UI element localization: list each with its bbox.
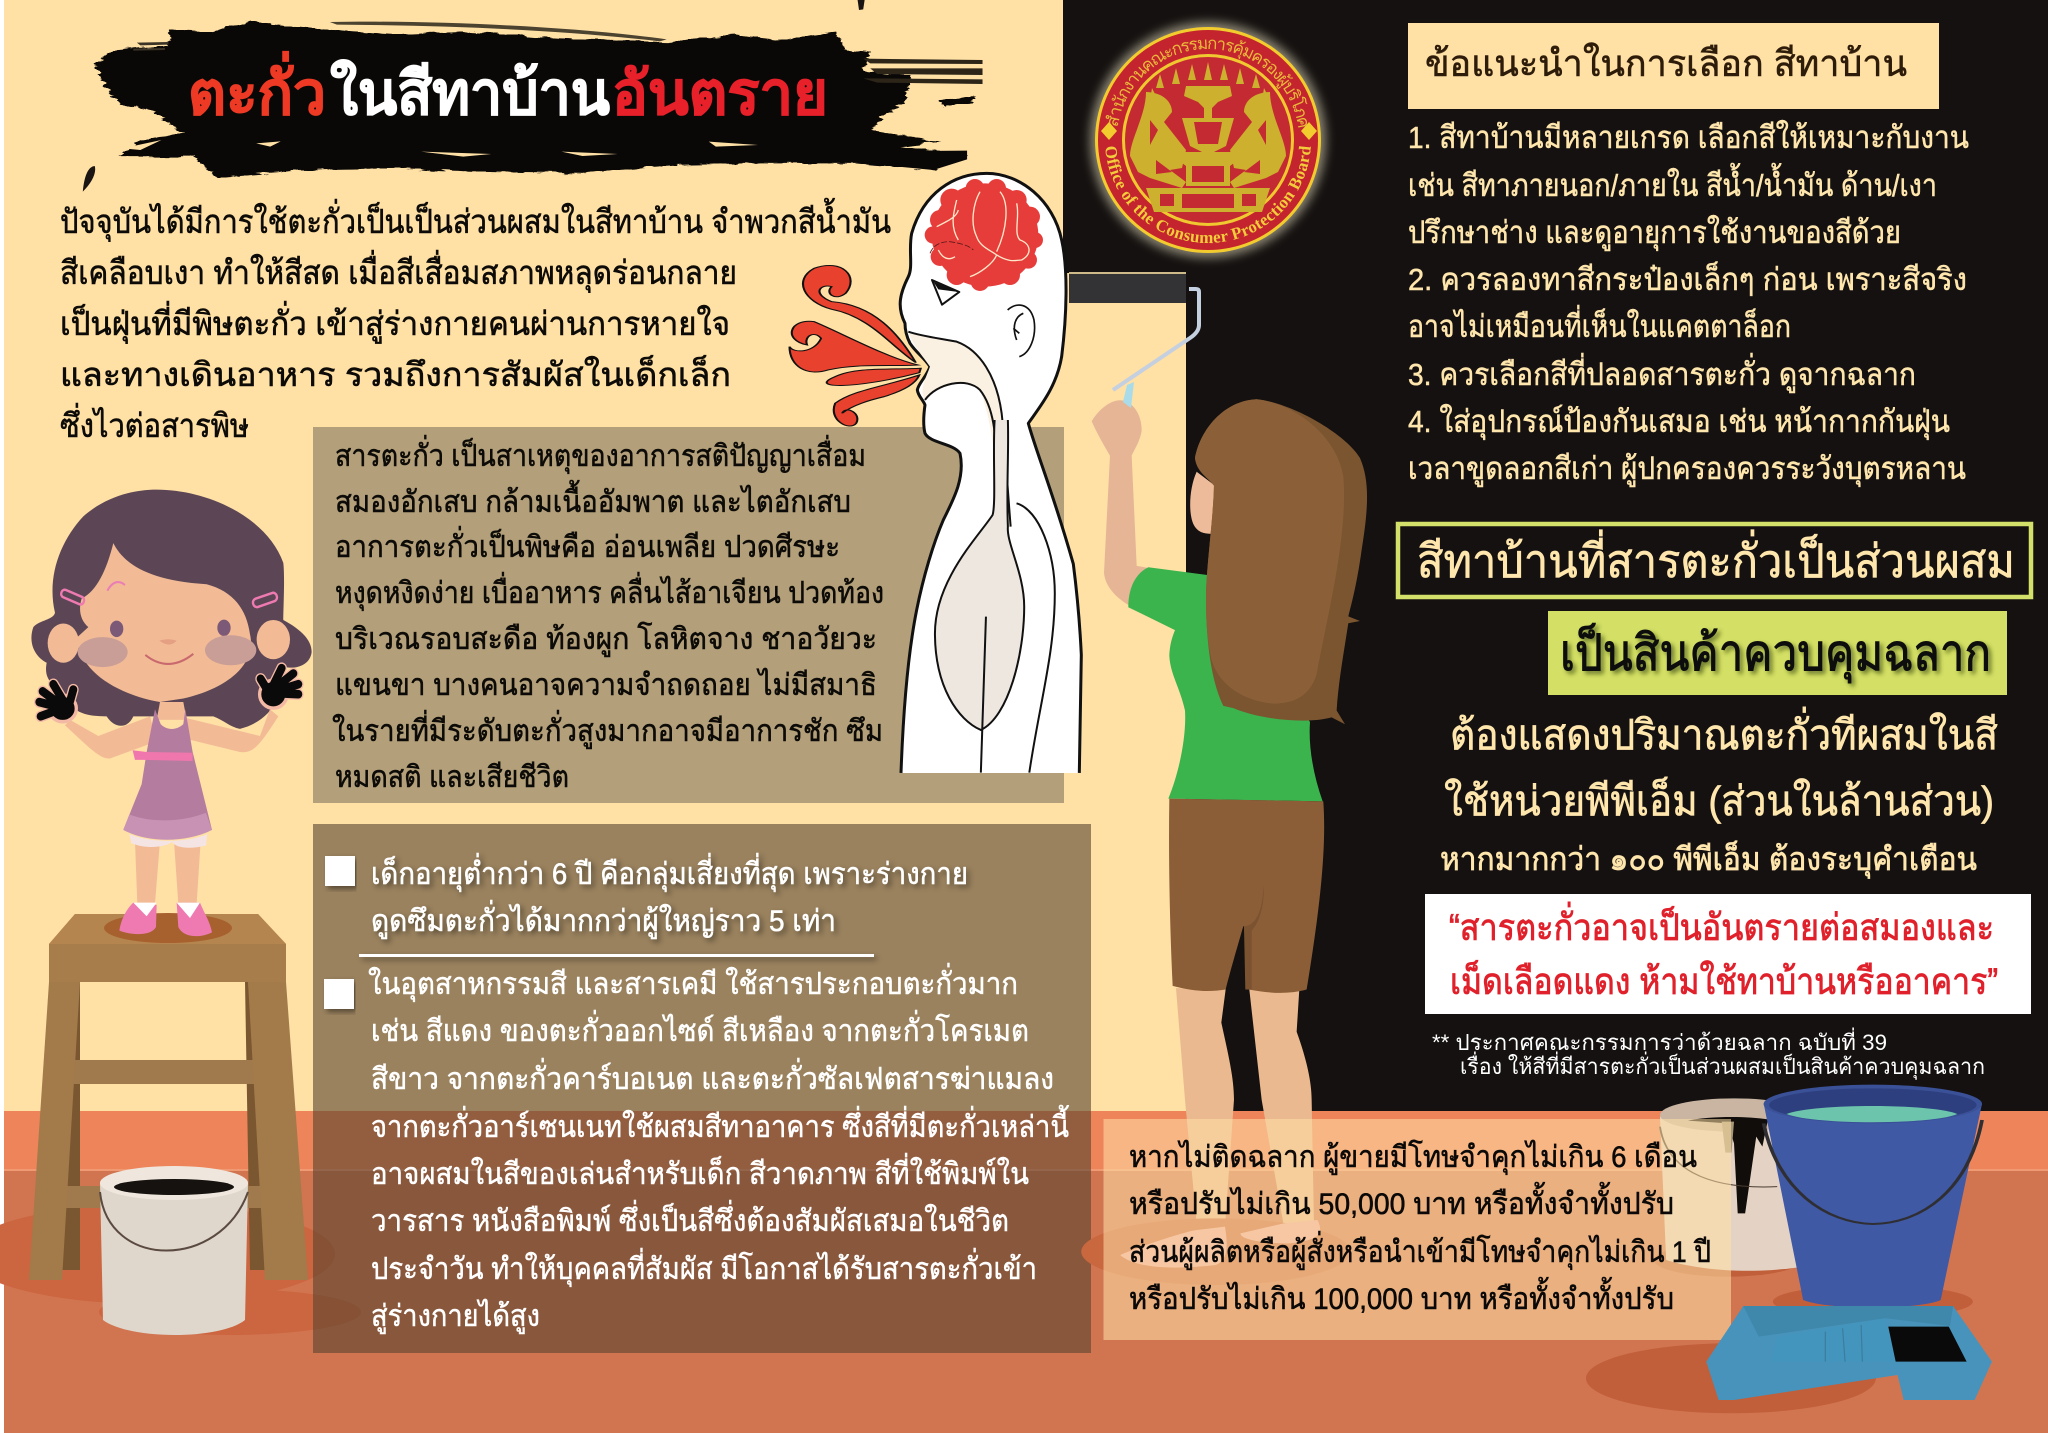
text block: paint selection tips: 1. สีทาบ้านมีหลายเกรด เลือกสีให้เหมาะกับงาน <box>1408 120 1969 155</box>
industry risk text <box>368 963 1069 1334</box>
woman arm <box>1092 400 1150 605</box>
girl left black hand <box>39 684 73 718</box>
text block: labelling requirement: ต้องแสดงปริมาณตะกั่วทีผสมในสี <box>1450 707 1998 758</box>
text block: paint selection tips: 2. ควรลองทาสีกระป๋องเล็กๆ ก่อน เพราะสีจริง <box>1408 261 1967 297</box>
illustration: paint can left <box>100 1166 248 1335</box>
woman shirt <box>1128 567 1323 801</box>
heading: paint selection tips <box>1408 23 1939 109</box>
industry risk text: สีขาว จากตะกั่วคาร์บอเนต และตะกั่วซัลเฟตสารฆ่าแมลง <box>371 1058 1054 1096</box>
airway <box>908 332 1010 527</box>
painted wall strip <box>1063 273 1186 1111</box>
seal: Office of the Consumer Protection Board <box>1083 15 1333 265</box>
floor <box>4 1111 2048 1433</box>
callout: lead paint heading: สีทาบ้านที่สารตะกั่วเป็นส่วนผสม <box>1417 529 2015 587</box>
industry risk text: ในอุตสาหกรรมสี และสารเคมี ใช้สารประกอบตะกั่วมาก <box>368 963 1018 1003</box>
bullet square 2 <box>324 979 354 1009</box>
seal diamonds <box>1101 122 1317 140</box>
text block: labelling requirement: หากมากกว่า ๑๐๐ พีพีเอ็ม ต้องระบุคำเตือน <box>1440 840 1977 879</box>
body silhouette <box>900 173 1081 773</box>
floor shadows left <box>0 1204 361 1335</box>
illustration: floor shadows and woman's feet <box>1081 1218 1973 1413</box>
panel: lead symptoms: อาการตะกั่วเป็นพิษคือ อ่อนเพลีย ปวดศีรษะ <box>335 526 840 564</box>
panel: lead symptoms: แขนขา บางคนอาจความจำถดถอย ไม่มีสมาธิ <box>335 667 877 702</box>
eye <box>932 280 959 305</box>
ear <box>1008 305 1035 357</box>
woman hair <box>1195 399 1367 724</box>
bullet square 1 <box>325 856 355 886</box>
footnote: เรื่อง ให้สีที่มีสารตะกั่วเป็นส่วนผสมเป็นสินค้าควบคุมฉลาก <box>1460 1051 1985 1080</box>
title: ในสีทาบ้าน <box>330 59 610 127</box>
panel: lead symptoms: สมองอักเสบ กล้ามเนื้ออัมพาต และไตอักเสบ <box>335 480 851 519</box>
industry risk text: ประจำวัน ทำให้บุคคลที่สัมผัส มีโอกาสได้รับสารตะกั่วเข้า <box>371 1248 1037 1288</box>
children risk text: ดูดซึมตะกั่วได้มากกว่าผู้ใหญ่ราว 5 เท่า <box>371 900 836 939</box>
intro paragraph: ซึ่งไวต่อสารพิษ <box>60 403 249 444</box>
illustration: paint can right with drips <box>1660 1098 1820 1271</box>
callout: controlled label product <box>1548 611 2007 695</box>
illustration: blue bucket <box>1764 1085 1982 1307</box>
panel: lead symptoms: บริเวณรอบสะดือ ท้องผูก โลหิตจาง ชาอวัยวะ <box>335 621 877 657</box>
title <box>188 51 828 127</box>
illustration: stool <box>29 913 308 1280</box>
seal bottom text: Office of the Consumer Protection Board <box>1106 146 1311 244</box>
illustration: paint roller <box>1069 272 1199 408</box>
panel: lead symptoms <box>313 427 1064 803</box>
text block: paint selection tips: ปรึกษาช่าง และดูอายุการใช้งานของสีด้วย <box>1408 215 1901 252</box>
girl dress <box>123 709 212 848</box>
girl features <box>60 582 278 667</box>
panel: penalties: หากไม่ติดฉลาก ผู้ขายมีโทษจำคุกไม่เกิน 6 เดือน <box>1129 1139 1697 1176</box>
panel: children and industry risks <box>313 824 1091 1353</box>
text block: paint selection tips: อาจไม่เหมือนที่เห็นในแคตตาล็อก <box>1408 305 1791 344</box>
girl arms and legs <box>48 620 290 904</box>
woman face <box>1190 472 1215 534</box>
intro paragraph: เป็นฝุ่นที่มีพิษตะกั่ว เข้าสู่ร่างกายคนผ่านการหายใจ <box>60 301 730 344</box>
illustration: body diagram with brain <box>900 173 1081 773</box>
callout: lead paint heading <box>1398 524 2031 597</box>
intro paragraph: และทางเดินอาหาร รวมถึงการสัมผัสในเด็กเล็ก <box>60 355 731 393</box>
title ink brush stroke <box>83 0 983 192</box>
panel: lead symptoms: หงุดหงิดง่าย เบื่ออาหาร คลื่นไส้อาเจียน ปวดท้อง <box>335 572 884 612</box>
panel: penalties: หรือปรับไม่เกิน 100,000 บาท หรือทั้งจำทั้งปรับ <box>1129 1277 1674 1316</box>
panel: lead symptoms: หมดสติ และเสียชีวิต <box>335 761 569 794</box>
panel: penalties <box>1104 1119 1731 1340</box>
callout: controlled label product: เป็นสินค้าควบคุมฉลาก <box>1560 623 1991 683</box>
panel: lead symptoms: ในรายที่มีระดับตะกั่วสูงมากอาจมีอาการชัก ซึม <box>332 710 883 749</box>
background: dark wall <box>1063 0 2048 1111</box>
illustration: painter woman <box>1092 399 1367 1227</box>
background: cream wall <box>4 0 1064 1111</box>
footnote: ** ประกาศคณะกรรมการว่าด้วยฉลาก ฉบับที่ 39 <box>1432 1027 1887 1055</box>
seal top text: สำนักงานคณะกรรมการคุ้มครองผู้บริโภค <box>1106 40 1308 128</box>
illustration: paint tray <box>1706 1306 1992 1400</box>
title: อันตราย <box>612 60 828 127</box>
text block: paint selection tips: เวลาขูดลอกสีเก่า ผู้ปกครองควรระวังบุตรหลาน <box>1408 451 1966 488</box>
girl face <box>77 543 251 702</box>
panel: penalties: ส่วนผู้ผลิตหรือผู้สั่งหรือนำเข้ามีโทษจำคุกไม่เกิน 1 ปี <box>1129 1231 1711 1271</box>
industry risk text: จากตะกั่วอาร์เซนเนทใช้ผสมสีทาอาคาร ซึ่งสีที่มีตะกั่วเหล่านี้ <box>371 1105 1069 1144</box>
text block: labelling requirement: ใช้หน่วยพีพีเอ็ม (ส่วนในล้านส่วน) <box>1444 777 1994 824</box>
panel: penalties: หรือปรับไม่เกิน 50,000 บาท หรือทั้งจำทั้งปรับ <box>1129 1182 1674 1221</box>
woman shorts <box>1169 799 1324 993</box>
callout: warning text <box>1425 894 2031 1014</box>
illustration: exhaled lead dust flames <box>790 265 921 426</box>
woman legs <box>1176 988 1314 1227</box>
text block: paint selection tips <box>1408 120 1969 488</box>
children risk text <box>359 853 968 957</box>
illustration: girl with lead-stained hands <box>31 490 312 936</box>
text block: paint selection tips: 4. ใส่อุปกรณ์ป้องกันเสมอ เช่น หน้ากากกันฝุ่น <box>1408 404 1950 441</box>
intro paragraph: สีเคลือบเงา ทำให้สีสด เมื่อสีเสื่อมสภาพหลุดร่อนกลาย <box>60 250 737 293</box>
text block: paint selection tips: เช่น สีทาภายนอก/ภายใน สีน้ำ/น้ำมัน ด้าน/เงา <box>1408 163 1937 203</box>
industry risk text: สู่ร่างกายได้สูง <box>371 1298 540 1334</box>
title: ตะกั่ว <box>188 51 326 127</box>
intro paragraph: ปัจจุบันได้มีการใช้ตะกั่วเป็นเป็นส่วนผสมในสีทาบ้าน จำพวกสีน้ำมัน <box>60 198 891 242</box>
body outline <box>900 173 1081 773</box>
footnote <box>1432 1027 1985 1080</box>
panel: lead symptoms: สารตะกั่ว เป็นสาเหตุของอาการสติปัญญาเสื่อม <box>335 435 866 475</box>
girl hair <box>31 490 312 729</box>
industry risk text: เช่น สีแดง ของตะกั่วออกไซด์ สีเหลือง จากตะกั่วโครเมต <box>371 1010 1029 1048</box>
girl right black hand <box>261 668 298 704</box>
stomach and esophagus <box>935 420 1055 773</box>
industry risk text: วารสาร หนังสือพิมพ์ ซึ่งเป็นสีซึ่งต้องสัมผัสเสมอในชีวิต <box>371 1200 1009 1238</box>
seal emblem <box>1130 62 1286 212</box>
brain <box>925 179 1043 291</box>
intro paragraph <box>60 198 891 444</box>
industry risk text: อาจผสมในสีของเล่นสำหรับเด็ก สีวาดภาพ สีที่ใช้พิมพ์ใน <box>371 1153 1029 1191</box>
girl shoes <box>119 903 212 936</box>
heading: paint selection tips: ข้อแนะนำในการเลือก สีทาบ้าน <box>1425 42 1907 84</box>
text block: paint selection tips: 3. ควรเลือกสีที่ปลอดสารตะกั่ว ดูจากฉลาก <box>1408 353 1916 393</box>
text block: labelling requirement <box>1440 707 1998 879</box>
children risk text: เด็กอายุต่ำกว่า 6 ปี คือกลุ่มเสี่ยงที่สุด เพราะร่างกาย <box>371 853 968 893</box>
